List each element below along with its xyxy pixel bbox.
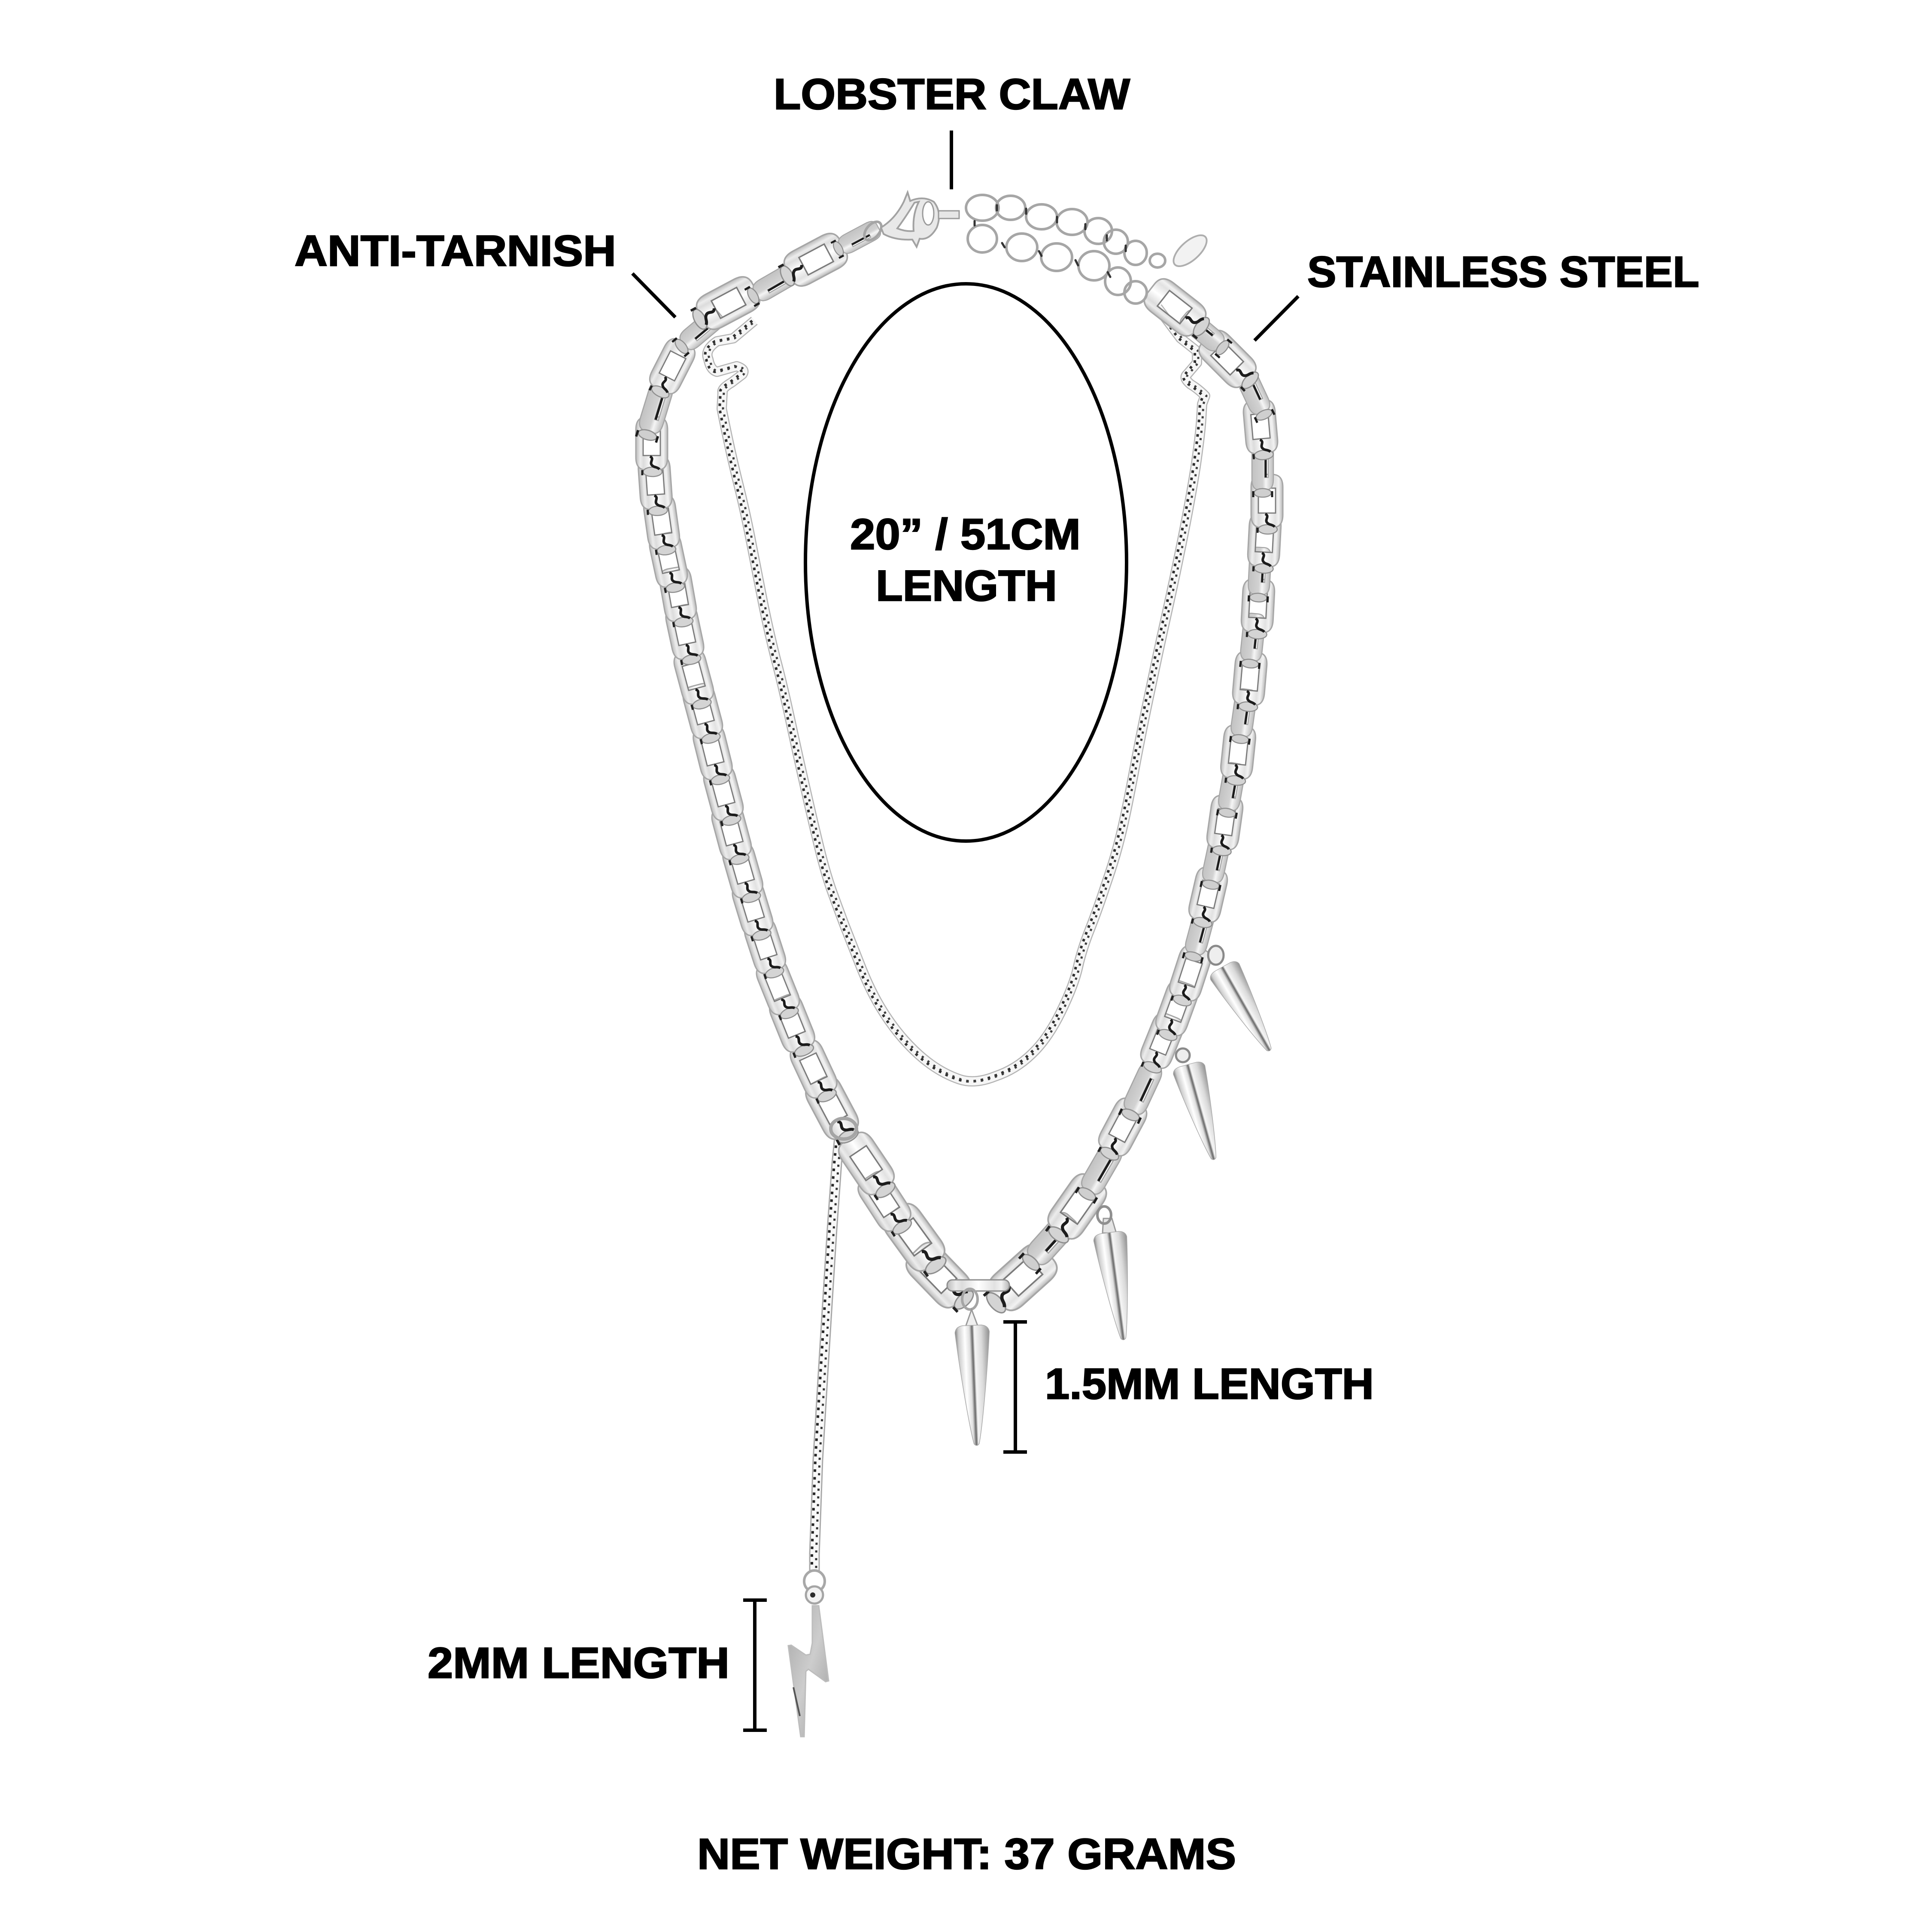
extender chain and tag — [966, 195, 1212, 304]
spike charm 1 — [955, 1289, 994, 1446]
spike charm 2 — [1093, 1206, 1140, 1342]
spike charm 3 — [1172, 1048, 1230, 1164]
length oval — [805, 284, 1127, 841]
bracket: bolt length — [743, 1600, 767, 1730]
label: bolt length: 2MM LENGTH — [428, 1639, 729, 1687]
label: length line 2: LENGTH — [876, 562, 1057, 610]
lobster claw clasp — [861, 192, 959, 247]
spike charm 4 — [1208, 946, 1284, 1059]
thin curb chain — [705, 307, 1206, 1081]
lariat junction ring — [831, 1118, 857, 1139]
leader line: anti-tarnish — [632, 273, 675, 317]
lightning bolt charm — [788, 1571, 829, 1737]
label: net weight: NET WEIGHT: 37 GRAMS — [697, 1830, 1236, 1878]
label: stainless steel: STAINLESS STEEL — [1307, 248, 1699, 296]
label: anti-tarnish: ANTI-TARNISH — [295, 227, 616, 275]
label: length line 1: 20” / 51CM — [850, 510, 1081, 559]
leader line: lobster claw — [950, 131, 953, 189]
necklace photo illustration — [635, 192, 1284, 1737]
large cable chain — [635, 219, 1283, 1321]
extender link joints — [975, 205, 1126, 277]
label: spike length: 1.5MM LENGTH — [1045, 1360, 1374, 1408]
extender tag — [1169, 230, 1212, 271]
leader line: stainless steel — [1255, 296, 1298, 340]
lariat drop chain — [812, 1138, 841, 1571]
label: lobster claw: LOBSTER CLAW — [774, 70, 1130, 118]
bottom connector bar — [947, 1280, 1009, 1291]
bracket: spike length — [1003, 1322, 1027, 1452]
